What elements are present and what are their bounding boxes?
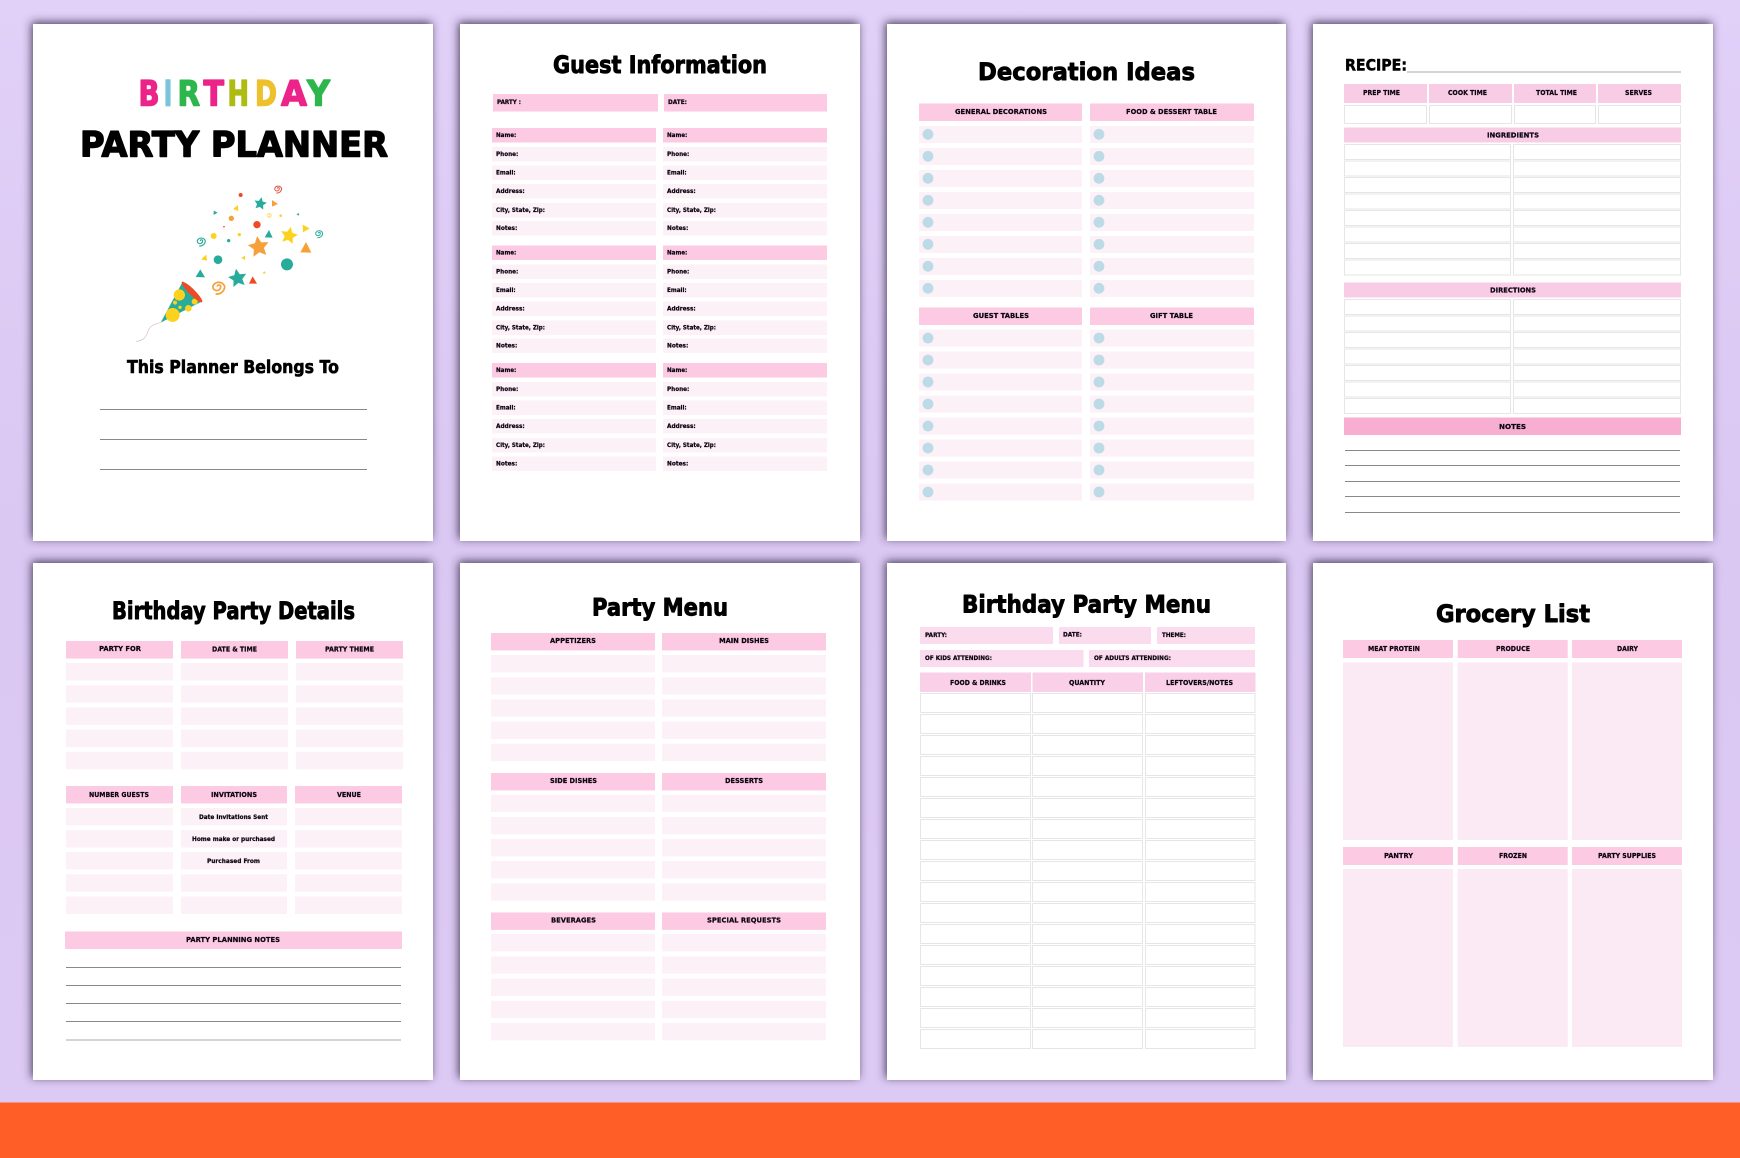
title: birthday	[138, 74, 331, 114]
list: food and dessert table	[1090, 104, 1254, 297]
guest card 4: Phone:	[667, 268, 689, 276]
heading: birthday party details: Birthday Party Details	[112, 597, 355, 625]
party info fields	[920, 627, 1255, 667]
guest card 6: Email:	[667, 404, 687, 412]
title: birthday: A	[281, 74, 307, 114]
list: guest tables	[919, 308, 1082, 501]
notes bar: NOTES	[1499, 422, 1526, 431]
list: side dishes: SIDE DISHES	[550, 776, 597, 785]
party info fields: PARTY:	[925, 631, 947, 639]
column: date and time: DATE & TIME	[212, 644, 257, 654]
guest card 5: Phone:	[496, 385, 518, 393]
ingredients table	[1344, 128, 1681, 275]
guest card 1: City, State, Zip:	[496, 206, 545, 214]
column: meat protein: MEAT PROTEIN	[1368, 644, 1420, 653]
guest card 2	[663, 128, 827, 236]
list: appetizers: APPETIZERS	[550, 636, 596, 645]
heading: guest information: Guest Information	[553, 51, 767, 79]
ingredients table: INGREDIENTS	[1487, 130, 1539, 140]
guest card 1: Address:	[496, 187, 525, 195]
guest card 6	[663, 363, 827, 471]
column: pantry	[1343, 847, 1453, 1047]
party info fields: OF ADULTS ATTENDING:	[1094, 654, 1171, 662]
guest card 4	[663, 246, 827, 353]
column: date and time	[181, 641, 288, 769]
guest card 1: Email:	[496, 168, 516, 176]
list: appetizers	[491, 633, 655, 761]
name lines	[100, 410, 367, 470]
guest card 1	[492, 128, 656, 236]
list: general decorations: GENERAL DECORATIONS	[955, 107, 1047, 116]
guest card 2: Notes:	[667, 224, 688, 232]
title: birthday: D	[255, 74, 277, 114]
list: beverages	[491, 912, 655, 1040]
notes bar	[1344, 418, 1681, 435]
time table: TOTAL TIME	[1536, 88, 1577, 97]
column: party theme: PARTY THEME	[325, 644, 374, 654]
panel: grocery list	[1313, 563, 1713, 1080]
column: party supplies	[1572, 847, 1682, 1047]
guest card 3: City, State, Zip:	[496, 324, 545, 332]
panel: recipe	[1313, 24, 1713, 541]
party planning notes bar: PARTY PLANNING NOTES	[186, 935, 280, 944]
time table: PREP TIME	[1363, 88, 1400, 97]
guest card 5: Notes:	[496, 460, 517, 468]
list: desserts	[662, 773, 826, 901]
column: party supplies: PARTY SUPPLIES	[1598, 851, 1656, 860]
list: special requests	[662, 912, 826, 1040]
notes lines	[1345, 450, 1680, 512]
guest card 5: City, State, Zip:	[496, 441, 545, 449]
panel: birthday party menu	[887, 563, 1286, 1080]
heading: decoration ideas: Decoration Ideas	[978, 58, 1195, 86]
title: birthday: Y	[306, 74, 331, 114]
guest card 3: Address:	[496, 304, 525, 312]
heading: recipe with line: RECIPE:	[1345, 56, 1407, 74]
guest card 2: Address:	[667, 187, 696, 195]
column: party theme	[296, 641, 403, 769]
list: special requests: SPECIAL REQUESTS	[707, 916, 781, 924]
guest card 5: Name:	[496, 366, 516, 374]
directions table	[1344, 282, 1681, 414]
guest card 4: City, State, Zip:	[667, 324, 716, 332]
guest card 3	[492, 246, 656, 353]
directions table: DIRECTIONS	[1490, 286, 1536, 294]
guest card 4: Email:	[667, 286, 687, 294]
panel: decoration ideas	[887, 24, 1286, 541]
title: birthday: H	[228, 74, 249, 114]
guest card 1: Name:	[496, 131, 516, 139]
orange footer band	[0, 1102, 1740, 1158]
guest card 1: Notes:	[496, 224, 517, 232]
column: pantry: PANTRY	[1384, 851, 1414, 860]
panel: guest information	[460, 24, 860, 541]
column: dairy: DAIRY	[1617, 644, 1639, 653]
list: main dishes	[662, 633, 826, 761]
guest card 5: Address:	[496, 422, 525, 430]
title: birthday: R	[178, 74, 200, 114]
guest card 6: Address:	[667, 422, 696, 430]
list: gift table: GIFT TABLE	[1150, 311, 1193, 320]
column: invitations: Purchased From	[207, 857, 260, 865]
party and date bars	[493, 94, 827, 112]
column: party for	[66, 641, 173, 769]
list: general decorations	[919, 104, 1082, 297]
party info fields: THEME:	[1162, 631, 1186, 639]
guest card 6: Notes:	[667, 460, 688, 468]
column: venue	[295, 786, 402, 914]
title: birthday: B	[138, 74, 160, 114]
column: number guests: NUMBER GUESTS	[89, 790, 149, 799]
panel: party menu	[460, 563, 860, 1080]
heading: party menu: Party Menu	[592, 594, 728, 622]
menu table: QUANTITY	[1069, 678, 1106, 687]
party info fields: OF KIDS ATTENDING:	[925, 654, 992, 662]
guest card 3: Notes:	[496, 342, 517, 350]
title: birthday: T	[204, 74, 224, 114]
icon: party popper with confetti	[136, 186, 323, 341]
menu table: LEFTOVERS/NOTES	[1166, 678, 1233, 687]
menu table	[920, 672, 1256, 1048]
notes lines	[66, 968, 401, 1040]
column: frozen: FROZEN	[1499, 851, 1527, 860]
party planning notes bar	[65, 932, 402, 949]
guest card 3: Phone:	[496, 268, 518, 276]
column: venue: VENUE	[337, 790, 361, 799]
panel: cover page	[33, 24, 433, 541]
list: desserts: DESSERTS	[725, 776, 763, 785]
heading: grocery list: Grocery List	[1436, 600, 1590, 628]
guest card 6: City, State, Zip:	[667, 441, 716, 449]
list: gift table	[1090, 308, 1254, 501]
guest card 5	[492, 363, 656, 471]
column: invitations	[181, 786, 287, 914]
guest card 1: Phone:	[496, 150, 518, 158]
time table	[1344, 84, 1681, 124]
column: dairy	[1572, 640, 1682, 840]
guest card 2: City, State, Zip:	[667, 206, 716, 214]
column: meat protein	[1343, 640, 1453, 840]
guest card 2: Email:	[667, 168, 687, 176]
guest card 3: Name:	[496, 248, 516, 256]
party info fields: DATE:	[1063, 630, 1082, 638]
party and date bars: DATE:	[668, 98, 687, 106]
time table: SERVES	[1625, 88, 1652, 97]
list: side dishes	[491, 773, 655, 901]
party and date bars: PARTY :	[497, 98, 521, 106]
guest card 6: Name:	[667, 366, 687, 374]
guest card 2: Phone:	[667, 150, 689, 158]
menu table: FOOD & DRINKS	[950, 678, 1006, 687]
list: food and dessert table: FOOD & DESSERT TABLE	[1126, 107, 1217, 116]
text: this planner belongs to: This Planner Belongs To	[127, 358, 339, 378]
guest card 3: Email:	[496, 286, 516, 294]
guest card 5: Email:	[496, 404, 516, 412]
title: party planner: PARTY PLANNER	[80, 126, 388, 166]
column: invitations: Date Invitations Sent	[199, 813, 268, 821]
list: beverages: BEVERAGES	[551, 916, 596, 924]
guest card 2: Name:	[667, 131, 687, 139]
list: guest tables: GUEST TABLES	[973, 311, 1029, 320]
guest card 6: Phone:	[667, 385, 689, 393]
column: produce	[1458, 640, 1568, 840]
column: invitations: Home make or purchased	[192, 835, 275, 843]
column: party for: PARTY FOR	[99, 644, 141, 653]
column: invitations: INVITATIONS	[211, 790, 257, 799]
panel: birthday party details	[33, 563, 433, 1080]
column: number guests	[66, 786, 173, 914]
heading: birthday party menu: Birthday Party Menu	[962, 590, 1211, 618]
guest card 4: Notes:	[667, 342, 688, 350]
column: frozen	[1458, 847, 1568, 1047]
list: main dishes: MAIN DISHES	[719, 636, 769, 645]
title: birthday: I	[164, 74, 172, 114]
column: produce: PRODUCE	[1496, 644, 1530, 653]
guest card 4: Address:	[667, 304, 696, 312]
guest card 4: Name:	[667, 248, 687, 256]
time table: COOK TIME	[1448, 88, 1487, 97]
